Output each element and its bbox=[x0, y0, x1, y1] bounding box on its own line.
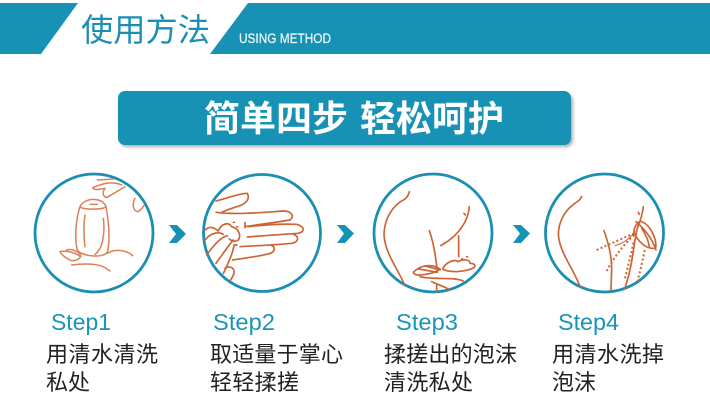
step 2 illustration bbox=[204, 174, 320, 292]
step 2 caption bbox=[210, 309, 343, 395]
subtitle: USING METHOD bbox=[239, 31, 331, 46]
step 1 illustration bbox=[35, 174, 153, 292]
step 1 caption bbox=[46, 309, 158, 395]
step 2 caption: 轻轻揉搓 bbox=[210, 370, 299, 395]
title: 使用方法 bbox=[81, 12, 210, 48]
step 3 caption: 清洗私处 bbox=[384, 370, 473, 395]
banner: 轻松呵护 bbox=[360, 98, 504, 139]
step 1 caption: 用清水清洗 bbox=[46, 342, 158, 367]
step 3 caption bbox=[384, 309, 517, 395]
step 3 illustration bbox=[374, 174, 492, 292]
arrow 2 bbox=[337, 225, 354, 243]
step 4 caption: 泡沫 bbox=[552, 370, 596, 395]
banner bbox=[118, 91, 573, 147]
step 4 caption bbox=[552, 309, 664, 395]
header band bbox=[0, 3, 710, 54]
arrow 1 bbox=[169, 225, 186, 243]
step 4 illustration bbox=[546, 174, 664, 292]
arrow 3 bbox=[513, 225, 530, 243]
step 2 caption: Step2 bbox=[213, 309, 275, 335]
step 1 caption: 私处 bbox=[46, 370, 90, 395]
step 4 caption: 用清水洗掉 bbox=[552, 342, 664, 367]
step 1 caption: Step1 bbox=[51, 309, 111, 335]
step 3 caption: Step3 bbox=[396, 309, 458, 335]
step 4 caption: Step4 bbox=[558, 309, 619, 335]
step 2 caption: 取适量于掌心 bbox=[210, 342, 343, 367]
banner text: 简单四步 bbox=[204, 98, 348, 139]
step 3 caption: 揉搓出的泡沫 bbox=[384, 342, 517, 367]
